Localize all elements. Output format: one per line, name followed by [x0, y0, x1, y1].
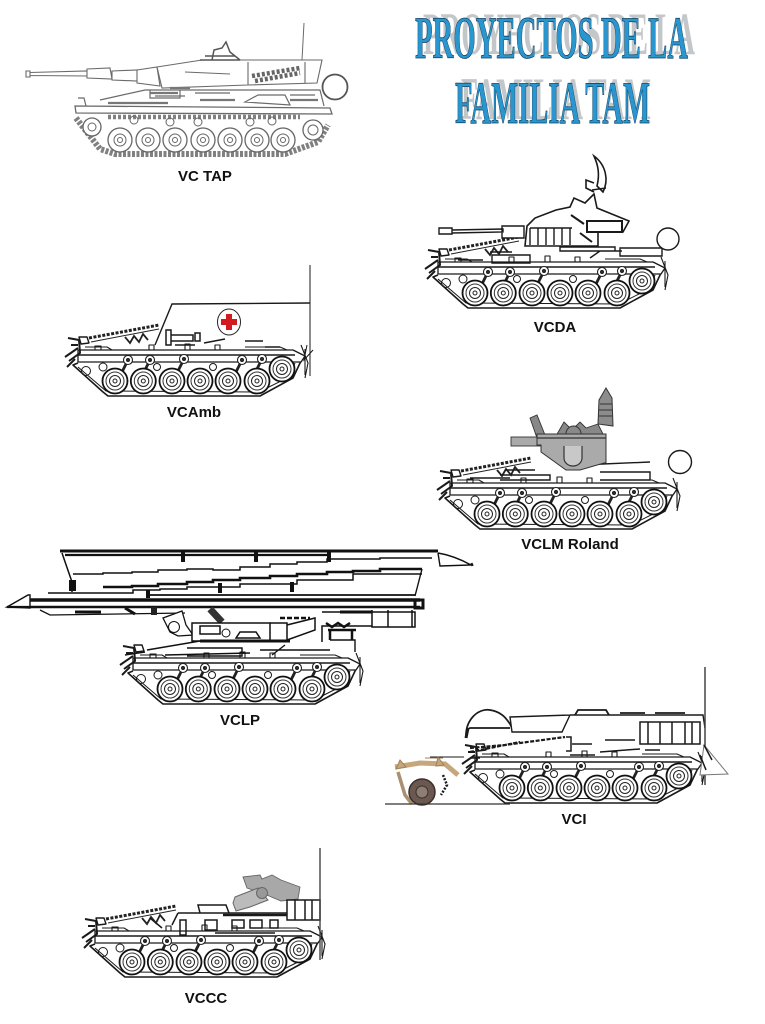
vehicle: VCLM Roland	[437, 388, 692, 529]
turret louvres	[530, 228, 572, 245]
deck gear	[78, 90, 324, 106]
label: VCI: VCI	[561, 811, 587, 828]
turret stowage	[252, 68, 300, 81]
body outline	[510, 715, 705, 732]
cannon	[26, 67, 160, 86]
hull	[425, 249, 668, 308]
stowage ring	[657, 228, 679, 250]
bridge upper span	[48, 551, 473, 598]
vehicle: VCDA anti-aircraft gun	[425, 156, 679, 308]
stowage ring	[668, 450, 692, 474]
bridge lower span	[7, 595, 423, 615]
deck equipment	[458, 247, 662, 263]
deck equipment	[166, 330, 280, 347]
cupola	[200, 42, 240, 60]
body outline	[155, 303, 310, 345]
track	[76, 118, 328, 154]
hull	[65, 337, 308, 396]
glacis cable	[470, 737, 565, 752]
label: VCDA: VCDA	[534, 319, 576, 336]
launch mechanism	[163, 609, 415, 642]
antenna and rear	[304, 265, 313, 376]
roof	[172, 905, 287, 925]
stowage boxes	[640, 722, 700, 744]
turret	[525, 194, 629, 246]
deck equipment	[470, 462, 650, 480]
hull	[437, 470, 680, 529]
ground line	[385, 803, 510, 805]
stowage ring	[322, 74, 348, 100]
title: Proyectos de la Familia TAM	[415, 1, 695, 136]
label: VCAmb: VCAmb	[167, 404, 221, 421]
vehicle: VCLP bridge layer	[7, 551, 473, 704]
deck equipment	[125, 640, 355, 656]
hull	[120, 645, 363, 704]
antenna	[302, 23, 304, 60]
radar dish	[586, 156, 606, 192]
excavator bucket	[466, 710, 513, 738]
antenna	[704, 667, 706, 785]
vehicle: VCAmb ambulance	[65, 265, 313, 396]
antenna	[319, 848, 321, 960]
vehicle: VCCC command vehicle	[82, 848, 325, 977]
road wheels	[83, 116, 323, 152]
label: VCLM Roland: VCLM Roland	[521, 536, 619, 553]
label: VCLP: VCLP	[220, 712, 260, 729]
missile launcher	[233, 875, 300, 911]
fender	[75, 106, 332, 114]
deck equipment	[150, 918, 278, 935]
hull	[462, 744, 705, 803]
mine plough	[395, 757, 464, 805]
label: VC TAP: VC TAP	[178, 168, 232, 185]
turret	[511, 388, 613, 470]
turret hatches	[571, 215, 622, 242]
stowage	[287, 900, 320, 920]
red cross roundel	[218, 309, 240, 335]
vehicle: VCI engineer vehicle	[385, 667, 728, 805]
label: VCCC: VCCC	[185, 990, 227, 1007]
dozer blade	[700, 745, 728, 775]
vehicle: VC TAP tank	[26, 23, 348, 154]
barrel	[439, 226, 524, 238]
deck equipment	[470, 737, 660, 758]
hull	[82, 918, 325, 977]
turret	[157, 60, 322, 88]
